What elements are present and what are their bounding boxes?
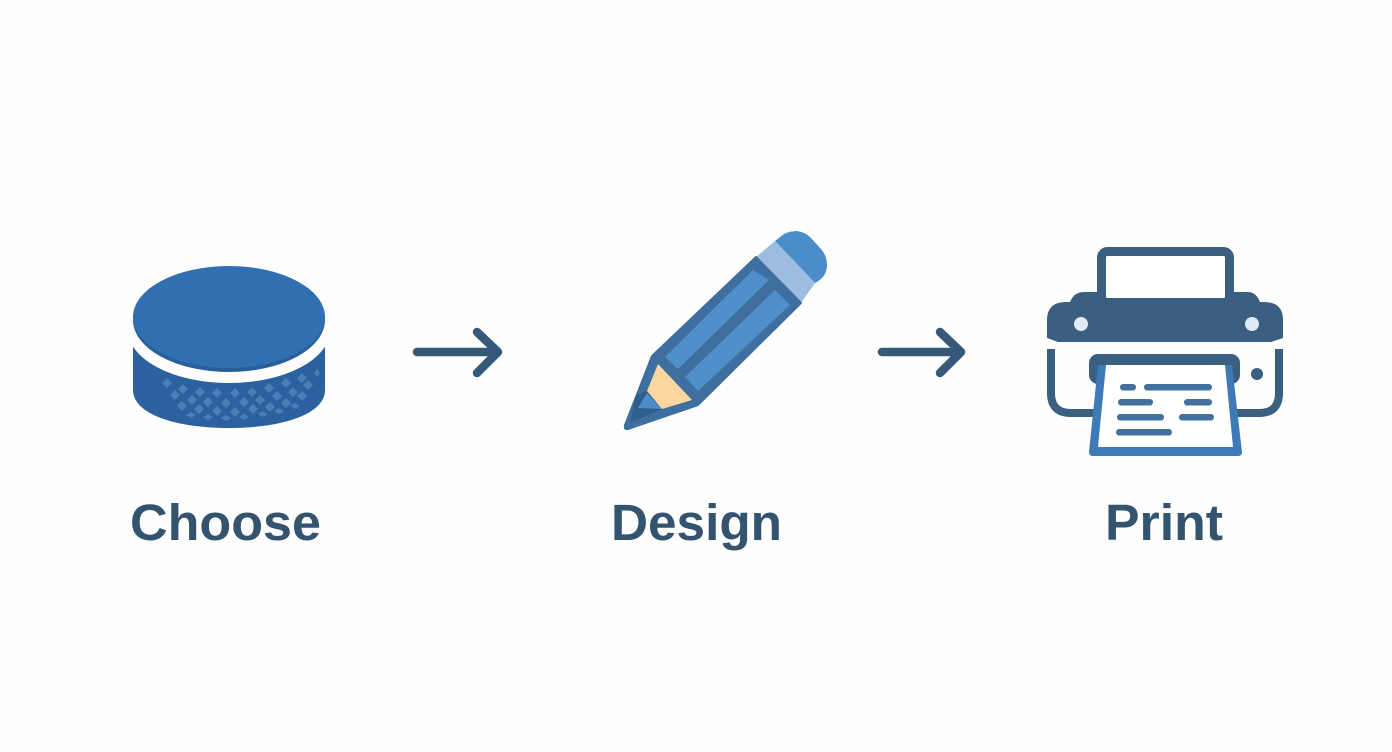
arrow: choose to design (417, 332, 498, 373)
label: Design: Design (611, 494, 782, 551)
icon: pencil (625, 231, 827, 429)
arrow: design to print (882, 332, 961, 373)
label: Print: Print (1105, 494, 1223, 551)
label: Choose: Choose (130, 494, 321, 551)
icon: printer (1047, 252, 1283, 456)
icon: hockey puck (128, 266, 330, 428)
